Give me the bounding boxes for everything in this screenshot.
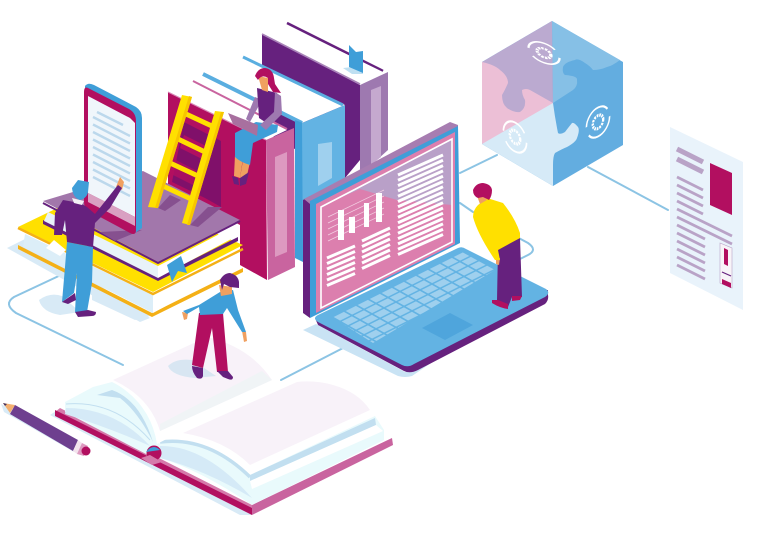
- pants: [497, 238, 522, 307]
- front page, right: [183, 381, 370, 465]
- man in yellow: [473, 183, 522, 309]
- pants: [192, 313, 228, 372]
- skirt: [235, 122, 278, 165]
- top purple book: [43, 171, 240, 282]
- phone buttons: [88, 193, 135, 226]
- puzzle piece: bottom left: [482, 103, 579, 186]
- pencil: [1, 403, 90, 456]
- bookmark: [167, 256, 187, 282]
- rear page, left: [107, 336, 280, 444]
- cover: [55, 408, 252, 511]
- document small product box: [720, 243, 732, 288]
- pants: [62, 242, 93, 312]
- icon: gear right: [586, 102, 610, 142]
- shadow: [50, 411, 252, 515]
- bar chart: [328, 190, 384, 241]
- laptop: [303, 122, 548, 372]
- lid: [303, 196, 310, 318]
- icon: gear top: [528, 38, 560, 68]
- screen: [316, 132, 455, 313]
- ribbon: [141, 446, 162, 465]
- sweater: [183, 290, 246, 332]
- torso: [257, 88, 280, 124]
- connector lines: [9, 155, 668, 380]
- puzzle piece: left pink: [482, 60, 553, 144]
- phone screen text: [93, 112, 130, 196]
- laptop: [228, 113, 258, 136]
- hands: [182, 312, 188, 320]
- hair: [255, 68, 281, 93]
- shoes: [492, 300, 508, 309]
- face: [219, 285, 232, 296]
- document text lines: [677, 149, 732, 279]
- hand: [116, 177, 124, 190]
- open book: [50, 336, 393, 515]
- purple book: [262, 23, 388, 178]
- sleeve left: [246, 97, 262, 122]
- trackpad: [422, 313, 473, 340]
- shoes: [62, 293, 76, 304]
- keyboard: [332, 252, 495, 343]
- shoes: [232, 176, 239, 185]
- hair: [72, 180, 89, 200]
- shadow: [168, 360, 216, 378]
- man pointing at phone: [46, 177, 124, 317]
- puzzle piece: top right: [552, 21, 620, 103]
- face: [258, 76, 268, 92]
- left page stack: [65, 382, 160, 456]
- shoes: [192, 366, 203, 379]
- rungs: [163, 114, 214, 199]
- puzzle cube: [482, 21, 623, 186]
- ground shadows: [7, 238, 450, 377]
- hand: [496, 258, 500, 265]
- face: [477, 196, 487, 204]
- maroon book: [168, 81, 295, 280]
- yellow book: [18, 185, 243, 317]
- screen text columns: [327, 155, 443, 286]
- hair: [473, 183, 492, 200]
- document red cover: [710, 163, 732, 215]
- legs: [234, 155, 243, 178]
- blue book: [203, 57, 345, 262]
- sleeve right: [260, 92, 282, 130]
- collar: [72, 198, 84, 205]
- woman reading: [228, 68, 282, 186]
- icon: gear left: [503, 117, 527, 157]
- laptop base: [315, 290, 548, 372]
- phone: [84, 84, 142, 234]
- document sheet: [670, 127, 743, 310]
- ladder shadow: [172, 122, 221, 207]
- sweater: [473, 198, 520, 260]
- hair: [220, 273, 239, 290]
- paper in hand: [46, 240, 66, 256]
- right page stack: [157, 416, 384, 505]
- puzzle piece: top left: [482, 21, 553, 112]
- man on book: [168, 273, 247, 380]
- sweater: [54, 185, 122, 247]
- ladder: [148, 95, 224, 225]
- ladder and phone shadows: [158, 195, 181, 211]
- bookmark: [343, 45, 363, 74]
